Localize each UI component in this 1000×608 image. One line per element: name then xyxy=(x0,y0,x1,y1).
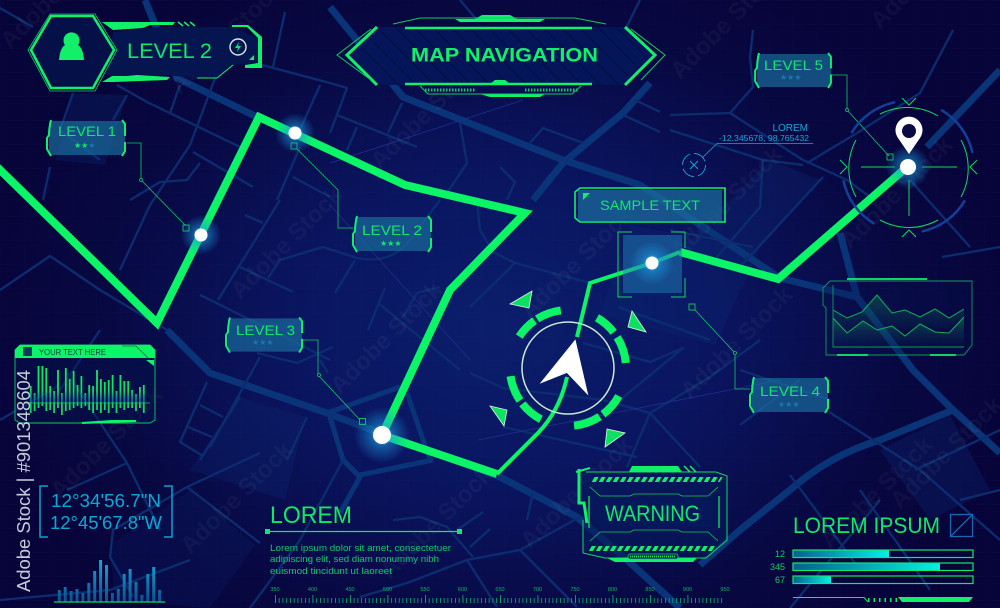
sample text panel: SAMPLE TEXT xyxy=(600,197,700,213)
lorem text block: adipiscing elit, sed diam nonummy nibh xyxy=(270,554,439,565)
callout: level 1: ★★★ xyxy=(74,141,96,150)
coordinates readout: 12°45'67.8"W xyxy=(50,513,162,533)
callout: level 2: LEVEL 2 xyxy=(362,222,422,238)
ruler scale: 850 xyxy=(645,587,655,593)
watermarks: Adobe Stock xyxy=(325,276,448,399)
lorem text block xyxy=(265,502,462,577)
level panel xyxy=(102,22,262,82)
progress bars: 67 xyxy=(775,575,785,585)
ruler scale: 950 xyxy=(720,587,730,593)
sample text panel xyxy=(575,188,725,222)
compass navigation arrow xyxy=(490,291,646,447)
coordinates readout: 12°34'56.7"N xyxy=(51,491,161,511)
chart: your text here waveform xyxy=(15,345,155,423)
callout: level 2: ★★★ xyxy=(380,239,402,248)
ruler scale: 700 xyxy=(533,587,542,593)
callout: level 4 xyxy=(689,304,828,413)
ruler scale: 600 xyxy=(458,587,467,593)
watermarks: Adobe Stock xyxy=(665,141,788,264)
watermarks: Adobe Stock xyxy=(225,181,348,304)
faint diagonal lines xyxy=(330,100,780,440)
level 2 label: LEVEL 2 xyxy=(127,39,212,63)
lorem ipsum progress panel xyxy=(770,513,973,602)
callout: level 5 xyxy=(755,53,893,160)
ruler scale: 400 xyxy=(308,587,317,593)
watermarks: Adobe Stock xyxy=(515,431,638,554)
progress bars xyxy=(770,549,973,585)
callout: level 3: ★★★ xyxy=(252,338,274,347)
ruler scale: 550 xyxy=(420,587,430,593)
stock id side text: Adobe Stock | #901348604 xyxy=(13,370,34,592)
icon: user xyxy=(59,32,84,60)
callout: level 5: LEVEL 5 xyxy=(764,57,823,73)
ruler scale: 900 xyxy=(683,587,692,593)
watermarks: Adobe Stock xyxy=(375,461,498,584)
lorem text block: LOREM xyxy=(270,502,352,529)
lorem text block: Lorem ipsum dolor sit amet, consectetuer xyxy=(270,543,451,554)
ruler scale: 350 xyxy=(270,587,280,593)
callout: level 5: ★★★ xyxy=(780,73,802,82)
icon: map pin xyxy=(896,117,922,154)
watermarks: Adobe Stock xyxy=(175,436,298,559)
coordinates label and marker: LOREM xyxy=(772,123,808,134)
bottom bar chart xyxy=(54,560,165,602)
lorem ipsum progress panel: LOREM IPSUM xyxy=(793,513,940,538)
title panel: map navigation xyxy=(337,15,665,97)
ruler scale: 500 xyxy=(383,587,392,593)
hexagon avatar xyxy=(28,14,117,91)
target reticle with pin xyxy=(818,77,998,257)
top left player badge xyxy=(28,14,262,91)
callout: level 4: LEVEL 4 xyxy=(760,383,820,399)
callout: level 2 xyxy=(291,143,431,252)
coordinates label and marker: -12.345678, 98.765432 xyxy=(719,133,809,143)
icon: energy gauge xyxy=(230,39,246,55)
watermarks: Adobe Stock xyxy=(45,381,168,504)
green navigation route xyxy=(0,117,907,474)
lorem text block: euismod tincidunt ut laoreet xyxy=(270,566,392,577)
icon: crossed square xyxy=(950,514,972,536)
ruler scale xyxy=(270,587,730,600)
coordinates readout xyxy=(40,486,172,537)
chart: your text here waveform: YOUR TEXT HERE xyxy=(39,348,106,357)
coordinates label and marker xyxy=(682,123,813,176)
ruler scale: 650 xyxy=(495,587,505,593)
watermarks: Adobe Stock xyxy=(365,51,488,174)
callout: level 1 xyxy=(47,120,189,231)
focus square on route xyxy=(618,232,685,297)
callout: level 3: LEVEL 3 xyxy=(236,322,295,338)
progress bars: 345 xyxy=(770,562,785,572)
icon: arrow xyxy=(542,341,587,393)
title text: MAP NAVIGATION xyxy=(411,46,598,66)
warning panel: WARNING xyxy=(605,501,700,526)
warning panel xyxy=(576,466,727,562)
watermarks: Adobe Stock xyxy=(675,281,798,404)
watermarks: Adobe Stock xyxy=(815,431,938,554)
progress bars: 12 xyxy=(775,549,785,559)
watermarks: Adobe Stock xyxy=(515,201,638,324)
callout: level 4: ★★★ xyxy=(778,400,800,409)
route nodes xyxy=(181,113,410,463)
ruler scale: 750 xyxy=(570,587,580,593)
callout: level 1: LEVEL 1 xyxy=(58,124,116,139)
callout: level 3 xyxy=(226,317,366,424)
right line chart panel xyxy=(823,279,972,355)
watermarks: Adobe Stock xyxy=(835,131,958,254)
ruler scale: 800 xyxy=(608,587,617,593)
ruler scale: 450 xyxy=(345,587,355,593)
